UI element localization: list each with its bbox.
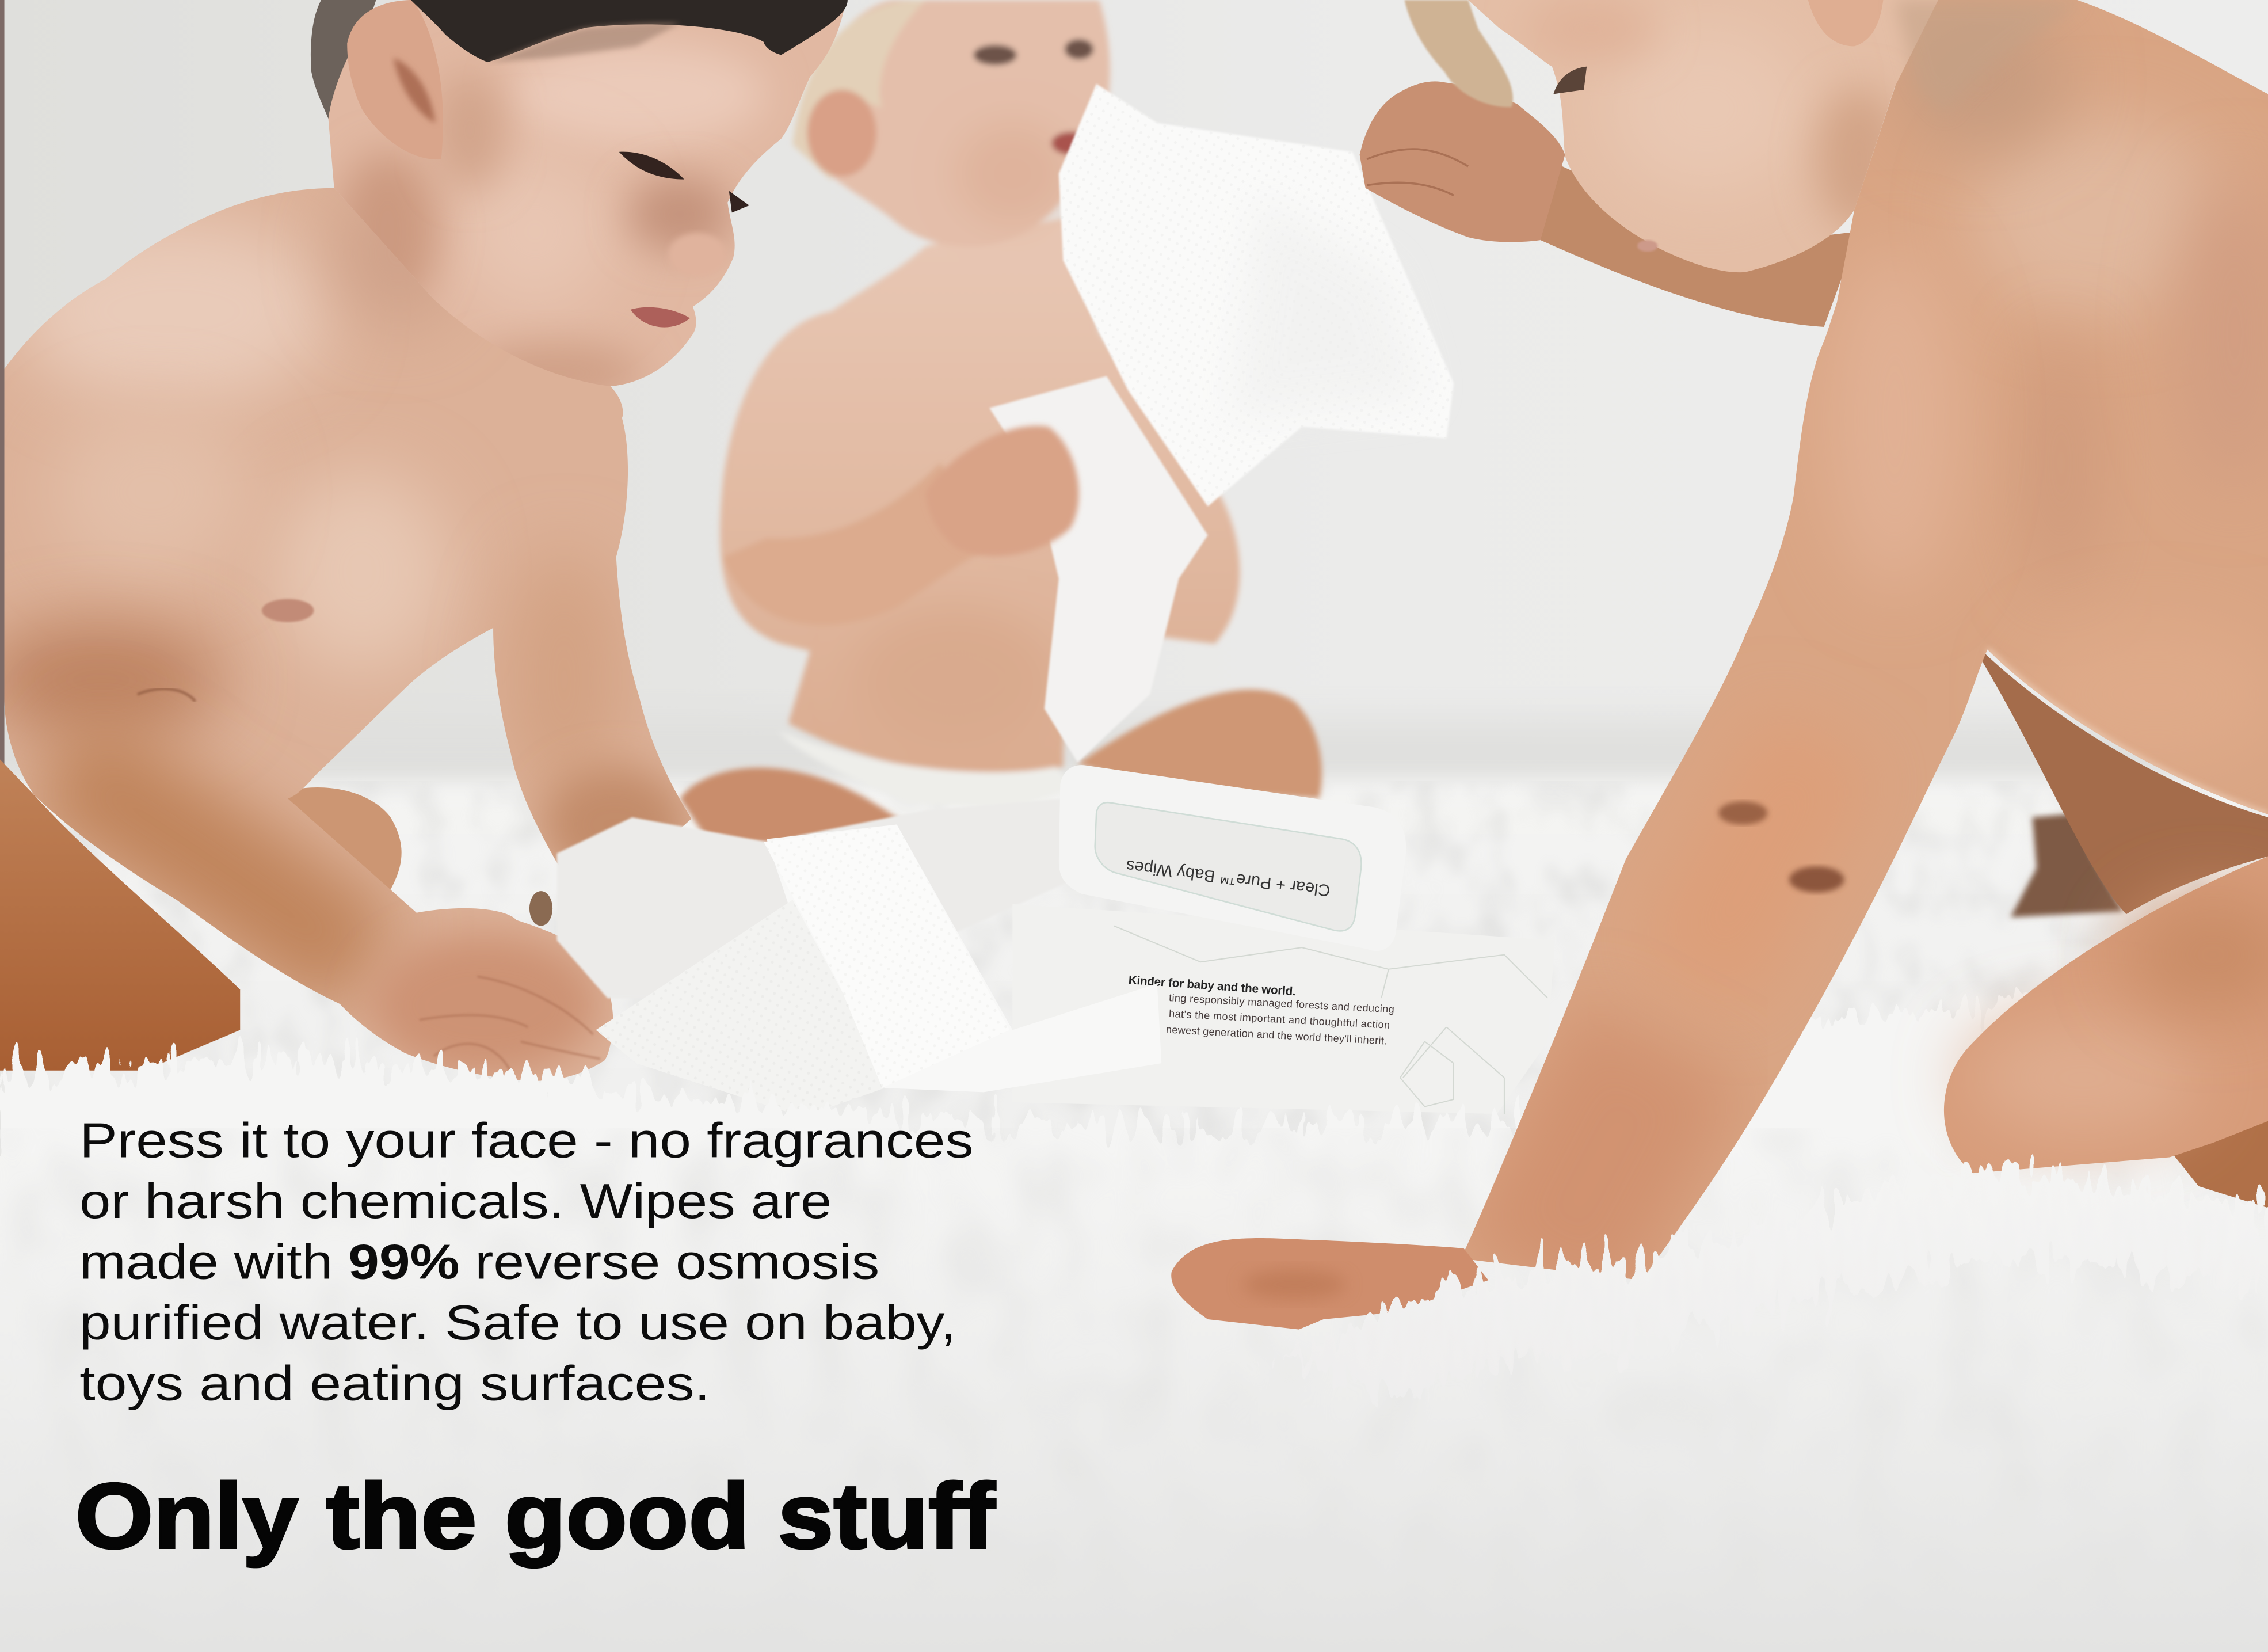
wipes package [529,765,1555,1117]
left baby elbow crease [138,689,195,702]
right baby far leg [1967,637,2268,914]
middle baby diaper [778,730,1073,810]
description text block: purified water. Safe to use on baby, [79,1296,956,1350]
package copy [1128,973,1394,1046]
right baby eye [1553,67,1587,94]
description text block [79,1114,974,1411]
left baby eyes, nose and mouth [619,152,684,180]
middle baby upper arm [723,463,998,626]
right baby torso and arm [1461,0,2268,1280]
right baby hand holding wipe [1360,81,1565,242]
package hexagon pattern [1114,926,1547,1114]
right baby lip [1637,240,1657,252]
description text block: or harsh chemicals. Wipes are [79,1174,832,1229]
description text block: Press it to your face - no fragrances [79,1114,974,1168]
shaggy rug fringe, middle row and foreground pile [0,984,2268,1652]
left baby ear [347,0,443,159]
right baby forearm [1541,165,1859,327]
foreground wipe pile [596,824,1161,1117]
lid label frame [1095,802,1361,931]
title: Only the good stuff [75,1464,996,1568]
right baby foot [2170,1114,2268,1208]
left baby hair [411,0,848,62]
description text block: toys and eating surfaces. [79,1357,710,1411]
left baby fingers [420,976,600,1078]
right baby [1171,0,2268,1330]
small toy behind wipes [529,891,552,926]
right baby hair curl [1405,0,1513,107]
right baby back hair strands [1895,0,2083,116]
package lid [1059,765,1406,951]
right baby ear [1808,0,1883,46]
right baby knee [1944,857,2268,1173]
package body [1012,904,1555,1114]
package copy: hat's the most important and thoughtful action [1169,1008,1390,1031]
description text block: made with 99% reverse osmosis [79,1235,879,1290]
package copy: ting responsibly managed forests and reducing [1169,992,1394,1015]
left baby nipple [262,599,314,622]
middle baby torso [720,217,1240,775]
back loose wipes [557,798,1068,998]
lid brand text upside down: Clear + Pure™ Baby Wipes [1125,857,1331,900]
white shaggy rug, back section [0,781,2268,1652]
middle baby head [803,0,1110,247]
left baby lower body [0,759,240,1071]
wooden toy in the background [2011,813,2124,917]
middle baby legs [680,768,914,845]
raised white wipe [1059,84,1454,507]
right baby hand on rug [1171,1238,1488,1330]
package copy: newest generation and the world they'll inherit. [1166,1023,1388,1046]
right baby head [1468,0,1938,272]
middle baby hand over wipe [926,425,1079,556]
left baby side hair [311,0,376,123]
package copy: Kinder for baby and the world. [1128,973,1297,998]
left baby head [329,0,846,386]
blurred middle baby holding a wipe [680,0,1322,845]
shaggy rug fringe, front band over arm and hand [1273,1169,2268,1396]
right baby elbow marks [1718,801,1767,824]
left baby torso and arms [5,188,691,1081]
second wipe held by middle baby [989,376,1208,762]
left baby [0,0,848,1081]
